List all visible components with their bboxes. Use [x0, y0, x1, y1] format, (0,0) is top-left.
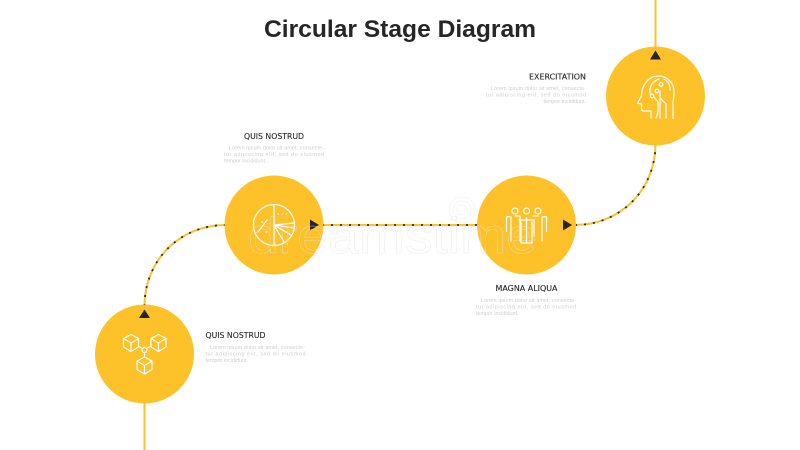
text: stage 2: QUIS NOSTRUD	[244, 132, 304, 141]
icon: people group	[506, 208, 546, 243]
arrow up	[650, 50, 661, 60]
text: stage 2: Lorem ipsum dolor sit amet, consecte-	[229, 146, 324, 152]
text: stage 4: EXERCITATION	[529, 72, 586, 82]
arrow up	[139, 310, 150, 318]
icon: head with circuit	[638, 76, 674, 118]
text: stage 1: QUIS NOSTRUD	[206, 331, 266, 340]
dashed connector: stage 1 to stage 2	[144, 225, 226, 306]
text: stage 3: tempor incididunt.	[476, 311, 519, 317]
text: stage 3	[476, 284, 576, 317]
text: stage 1: tur adipiscing elit, sed do eiusmod	[206, 352, 306, 358]
text: stage 3: tur adipiscing elit, sed do eiusmod	[476, 304, 576, 310]
top solid connector line	[654, 0, 656, 50]
text: stage 4: Lorem ipsum dolor sit amet, consecte-	[491, 86, 586, 92]
arrow right	[563, 220, 572, 230]
text: stage 1: Lorem ipsum dolor sit amet, consecte-	[210, 345, 305, 351]
dashed connector: stage 3 to stage 4	[575, 144, 656, 225]
stage 2 circle	[224, 176, 324, 274]
text: stage 3: MAGNA ALIQUA	[496, 284, 558, 293]
dashed connector: stage 2 to stage 3	[322, 224, 478, 226]
text: stage 2: tempor incididunt.	[224, 158, 267, 164]
bottom solid connector line	[144, 400, 146, 450]
text: stage 4	[486, 72, 586, 105]
title: Circular Stage Diagram	[264, 16, 536, 43]
stage 3 circle	[477, 176, 576, 274]
text: stage 2: tur adipiscing elit, sed do eiusmod	[224, 152, 324, 158]
stage 4 circle	[606, 46, 705, 146]
text: stage 4: tur adipiscing elit, sed do eiusmod	[486, 92, 586, 98]
stage 1 circle	[95, 304, 194, 404]
text: stage 1	[206, 331, 306, 364]
icon: cubes	[124, 334, 166, 374]
text: stage 3: Lorem ipsum dolor sit amet, consecte-	[481, 298, 576, 304]
text: stage 1: tempor incididunt.	[206, 358, 248, 364]
text: stage 2	[224, 132, 324, 164]
icon: pie chart	[254, 204, 294, 246]
watermark: dreamstime	[248, 208, 537, 264]
arrow right	[310, 220, 319, 230]
text: stage 4: tempor incididunt.	[543, 99, 586, 105]
